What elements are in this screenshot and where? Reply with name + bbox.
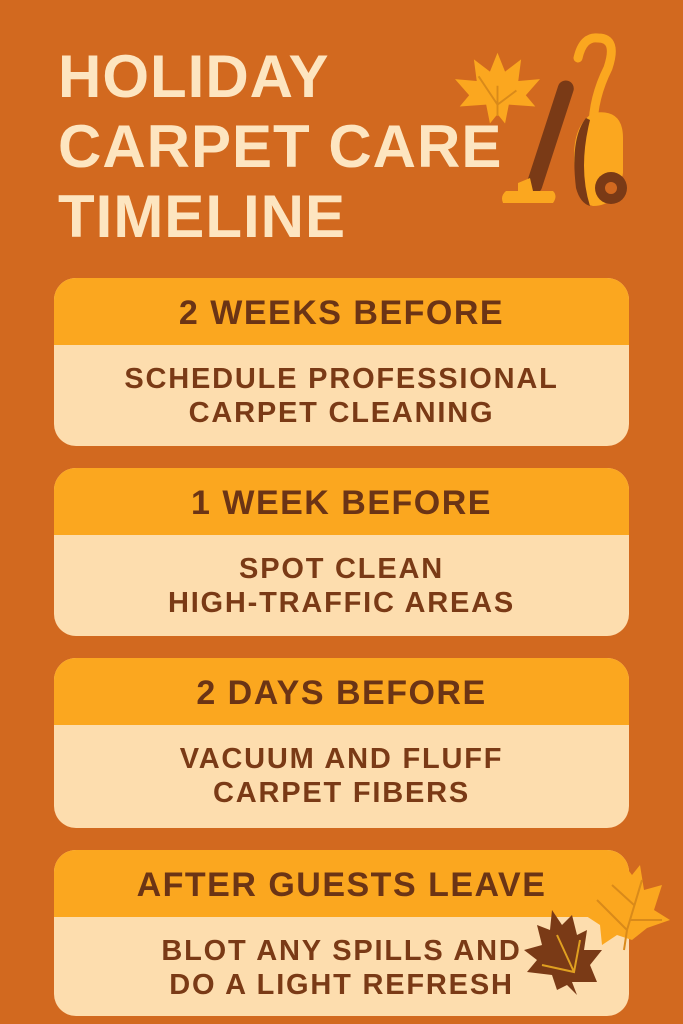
text: CARPET CLEANING bbox=[189, 397, 494, 429]
icon: maple leaf top bbox=[455, 53, 540, 124]
text bbox=[124, 363, 559, 429]
title: HOLIDAY bbox=[58, 43, 330, 110]
heading: AFTER GUESTS LEAVE bbox=[137, 866, 546, 904]
icon: brown leaf bottom bbox=[524, 910, 602, 995]
heading: 2 DAYS BEFORE bbox=[196, 674, 487, 712]
text: SPOT CLEAN bbox=[239, 553, 444, 585]
title: CARPET CARE bbox=[58, 113, 502, 180]
heading bbox=[54, 658, 629, 725]
heading bbox=[54, 468, 629, 535]
card: 2 weeks before bbox=[54, 278, 629, 446]
heading bbox=[54, 850, 629, 917]
icon: vacuum cleaner bbox=[502, 33, 627, 206]
text: VACUUM AND FLUFF bbox=[180, 743, 503, 775]
text: BLOT ANY SPILLS AND bbox=[161, 935, 522, 967]
text bbox=[161, 935, 522, 1001]
heading bbox=[54, 278, 629, 345]
title bbox=[58, 43, 502, 250]
heading: 1 WEEK BEFORE bbox=[191, 484, 492, 522]
heading: 2 WEEKS BEFORE bbox=[179, 294, 504, 332]
card: 2 days before bbox=[54, 658, 629, 828]
text: HIGH-TRAFFIC AREAS bbox=[168, 587, 515, 619]
card: 1 week before bbox=[54, 468, 629, 636]
text: DO A LIGHT REFRESH bbox=[169, 969, 514, 1001]
title: TIMELINE bbox=[58, 183, 346, 250]
card: after guests leave bbox=[54, 850, 629, 1016]
icon: yellow leaf bottom bbox=[588, 865, 670, 950]
text bbox=[180, 743, 503, 809]
text: SCHEDULE PROFESSIONAL bbox=[124, 363, 559, 395]
text: CARPET FIBERS bbox=[213, 777, 470, 809]
text bbox=[168, 553, 515, 619]
